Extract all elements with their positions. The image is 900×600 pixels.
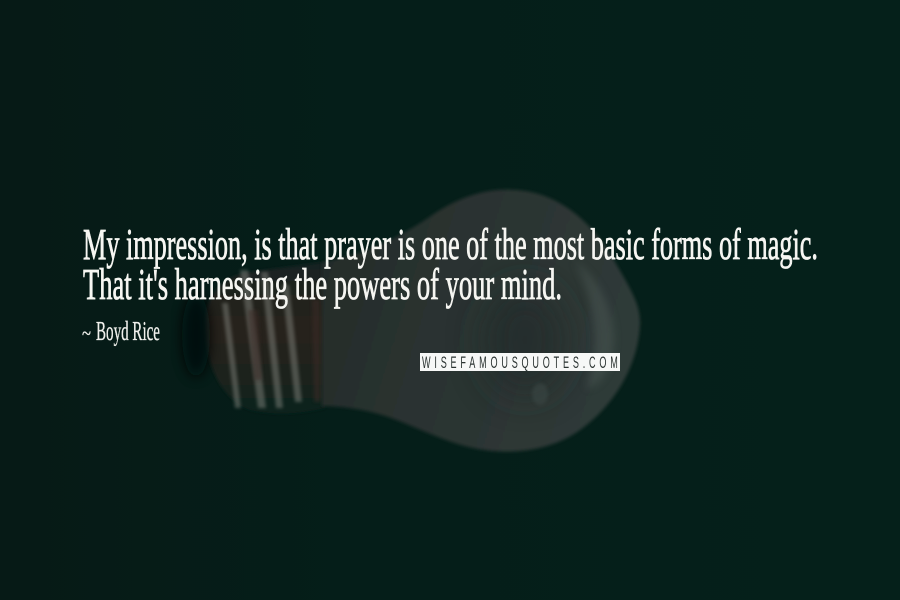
bulb inner shadow bbox=[483, 285, 567, 395]
attribution bbox=[82, 316, 160, 346]
bulb glass bbox=[322, 190, 640, 452]
screw threads bbox=[222, 270, 302, 408]
quote text: That it's harnessing the powers of your mind. bbox=[83, 260, 562, 309]
bulb curved highlight bbox=[575, 262, 614, 388]
attribution: Boyd Rice bbox=[96, 316, 160, 346]
attribution: ~ bbox=[82, 323, 91, 345]
thread shadow tone bbox=[248, 300, 321, 402]
base dark tip bbox=[182, 293, 210, 377]
watermark badge: WISEFAMOUSQUOTES.COM bbox=[422, 353, 618, 372]
bulb small reflection bbox=[532, 383, 548, 405]
illustration: light bulb bbox=[182, 190, 640, 452]
quote text bbox=[83, 220, 818, 309]
screw base bbox=[182, 262, 325, 414]
